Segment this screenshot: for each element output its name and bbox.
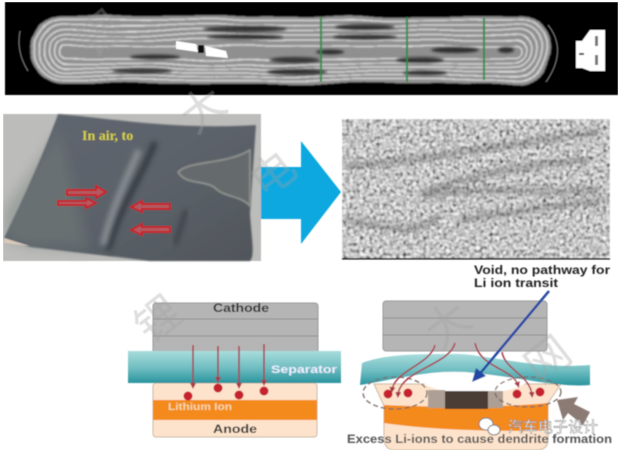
label: Anode: Anode <box>213 424 257 436</box>
logo: WeChat account mark <box>479 418 598 436</box>
green measurement lines <box>321 17 484 82</box>
void region and inactive material <box>418 370 530 409</box>
diagram: normal lithium transport <box>128 303 341 437</box>
dark bands <box>345 132 605 229</box>
label: Separator: Separator <box>271 364 338 376</box>
separator <box>128 351 341 383</box>
panel: photo of wrinkled electrode <box>3 114 261 261</box>
watermark strokes: 大 <box>416 292 481 358</box>
watermark strokes: 锂 <box>126 287 191 353</box>
watermark strokes <box>68 2 581 393</box>
cathode stack <box>383 301 547 351</box>
label: void: Void, no pathway for <box>474 265 611 277</box>
outer can arcs <box>19 25 558 82</box>
wrinkle <box>108 142 155 250</box>
cathode stack <box>153 303 318 353</box>
anode deformed <box>374 384 561 450</box>
separator curved <box>360 354 590 386</box>
cell cross-section body <box>30 16 552 84</box>
watermark strokes: 电 <box>241 142 306 208</box>
watermark strokes: 锂 <box>68 2 133 68</box>
anode stack <box>153 383 317 437</box>
arrow: blue process arrow <box>261 141 341 244</box>
label: dendrite: Excess Li-ions to cause dendrite formation <box>347 434 612 446</box>
dashed ellipses <box>363 377 561 409</box>
caption: In air: In air, to <box>82 129 133 144</box>
diagram: void and dendrite formation <box>347 265 612 450</box>
electrode sheet <box>4 114 256 261</box>
watermark strokes: 网 <box>516 327 581 393</box>
label: Lithium Ion: Lithium Ion <box>168 402 232 413</box>
bright tabs <box>176 41 228 58</box>
connector <box>576 30 605 71</box>
panel: SEM micrograph <box>342 119 610 260</box>
curved ion arrows <box>392 343 532 395</box>
watermark strokes: 大 <box>171 77 236 143</box>
lithium ions <box>184 384 268 400</box>
red arrows <box>58 186 170 235</box>
lithium ions <box>384 388 544 398</box>
ion arrows <box>193 344 264 386</box>
label: account name: 汽车电子设计 <box>508 419 598 436</box>
label: void: Li ion transit <box>474 278 558 290</box>
panel: CT scan of jelly-roll cell <box>5 2 618 95</box>
label: Cathode: Cathode <box>213 303 269 315</box>
pale stain <box>178 150 250 206</box>
arrow: pressure grey <box>557 397 590 425</box>
arrow: blue void pointer <box>472 291 549 382</box>
